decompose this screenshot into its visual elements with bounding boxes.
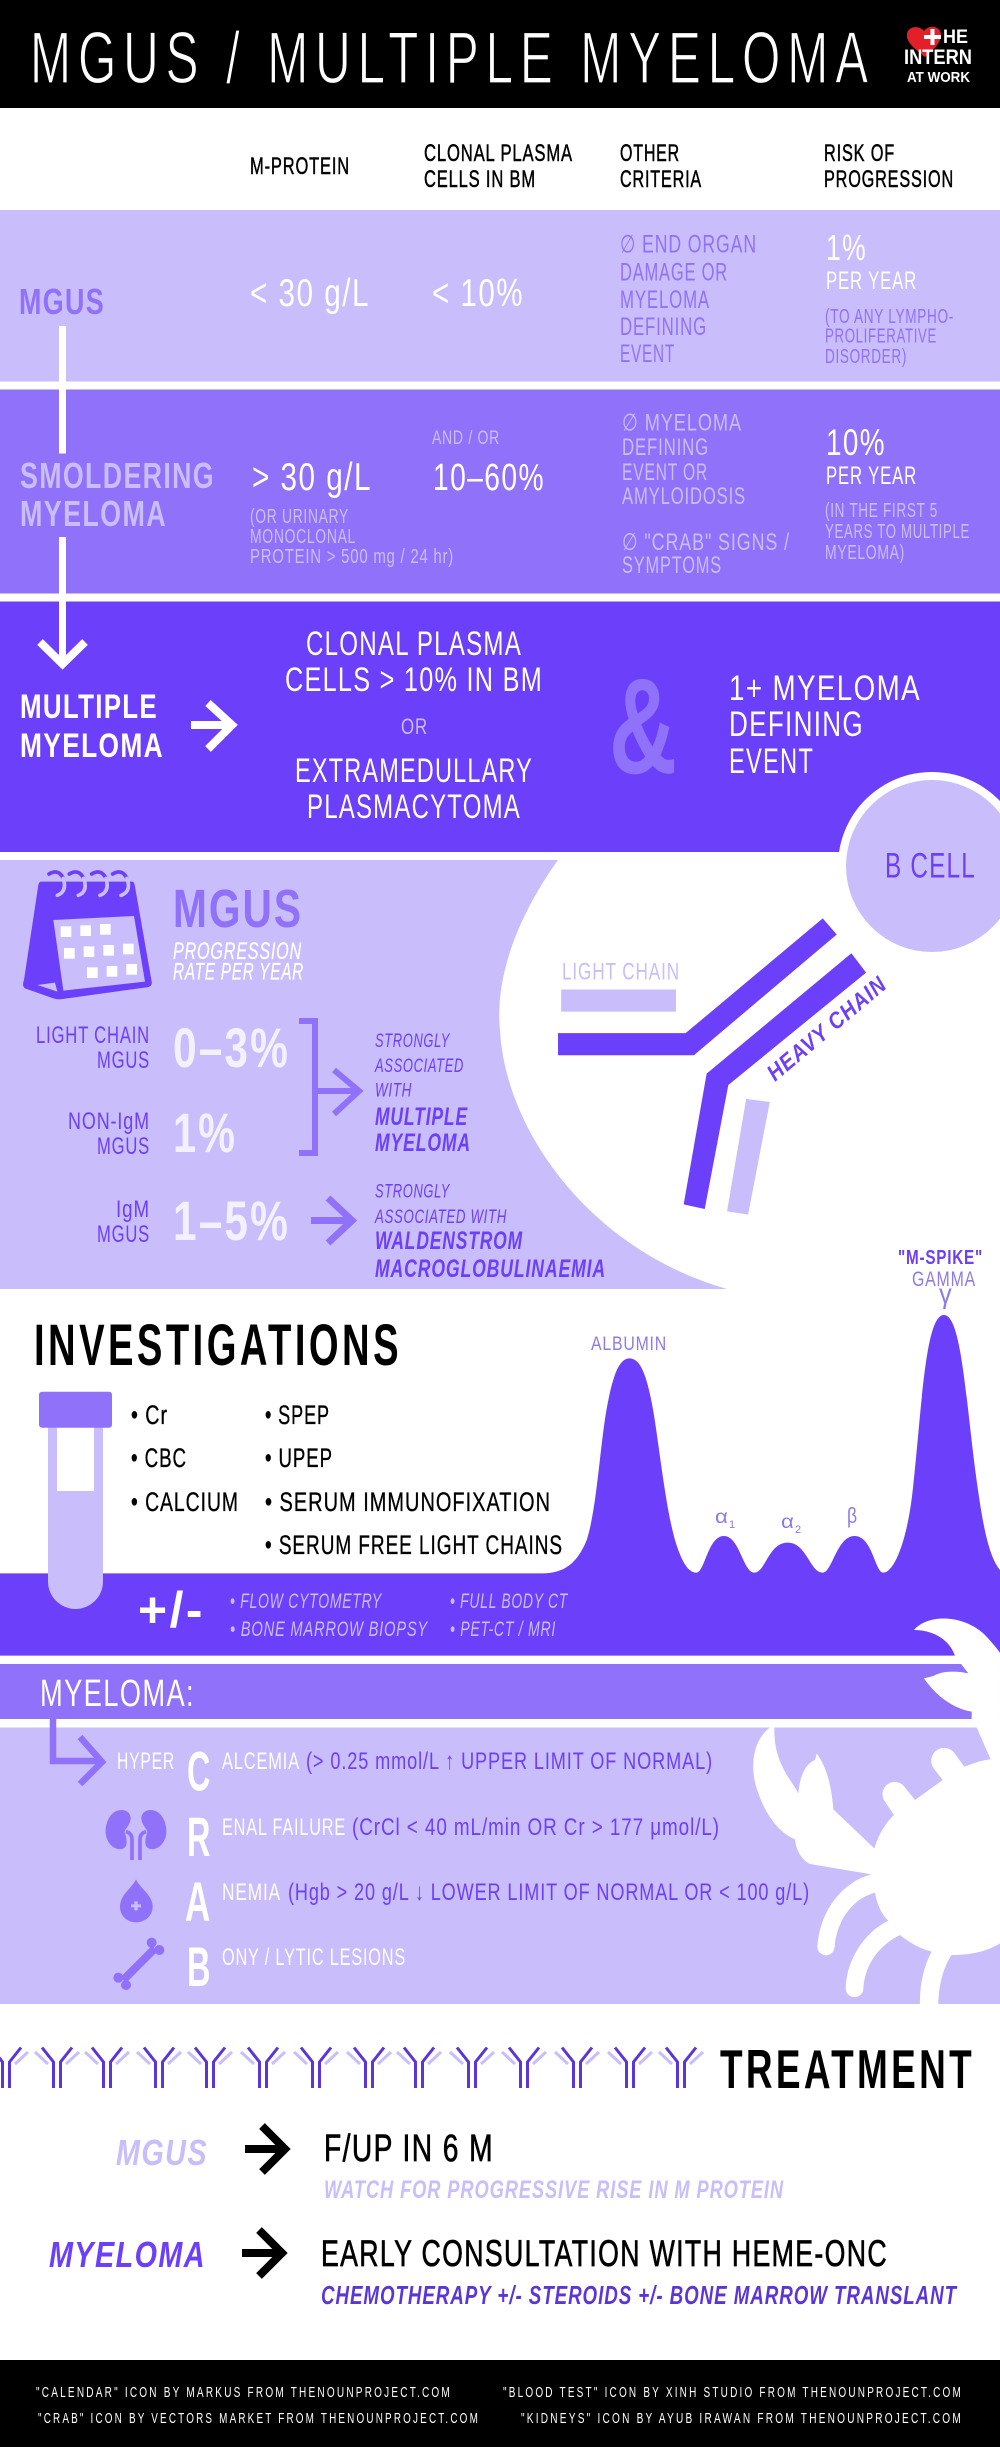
- rates table: LIGHT CHAIN: [36, 1022, 150, 1049]
- panel: smoldering myeloma row: EVENT OR: [622, 459, 708, 486]
- panel: smoldering myeloma row: ∅ MYELOMA: [622, 410, 742, 436]
- icon: B cell: [838, 772, 1000, 960]
- text: anemia: NEMIA: [222, 1879, 281, 1906]
- panel: smoldering myeloma row: PROTEIN > 500 mg / 24 hr): [250, 546, 454, 568]
- chart labels: 1: [729, 1519, 736, 1531]
- letters: CRAB: B: [187, 1935, 212, 1998]
- panel: smoldering myeloma row: MYELOMA: [20, 493, 167, 534]
- icon: bone: [113, 1938, 164, 1990]
- panel: MGUS row: DEFINING: [620, 313, 707, 341]
- text: strongly associated with multiple myeloma: MYELOMA: [375, 1129, 471, 1157]
- text: strongly associated with multiple myeloma: MULTIPLE: [375, 1103, 468, 1131]
- chart labels: γ: [939, 1278, 953, 1309]
- panel: multiple myeloma row: PLASMACYTOMA: [307, 788, 521, 826]
- text: renal failure: (CrCl < 40 mL/min OR Cr > 177 μmol/L): [352, 1814, 720, 1841]
- panel: MGUS row: PER YEAR: [826, 267, 917, 295]
- chart labels: ALBUMIN: [591, 1334, 667, 1355]
- logo: The Intern at Work: HE: [943, 27, 968, 48]
- logo: The Intern at Work: [904, 27, 972, 86]
- panel: MGUS row: PROLIFERATIVE: [825, 326, 937, 348]
- panel: smoldering myeloma row: PER YEAR: [826, 462, 917, 490]
- icon: calendar: [23, 872, 152, 999]
- text: anemia: [222, 1879, 810, 1906]
- text: strongly associated with multiple myeloma: STRONGLY: [375, 1031, 450, 1052]
- arrow: myeloma to CRAB: [53, 1719, 102, 1784]
- panel: CRAB criteria: [0, 1719, 1000, 2004]
- panel: multiple myeloma row: EVENT: [729, 742, 814, 781]
- letters: CRAB: [185, 1740, 212, 1998]
- panel: multiple myeloma row: MYELOMA: [20, 727, 164, 765]
- rates table: [36, 1016, 290, 1252]
- list: investigations column 2: [265, 1400, 563, 1560]
- treatment: myeloma: [49, 2230, 958, 2310]
- treatment: MGUS: [116, 2126, 784, 2204]
- column headers: CLONAL PLASMA: [424, 140, 573, 167]
- column headers: OTHER: [620, 140, 680, 167]
- panel: smoldering myeloma row: 10–60%: [433, 457, 545, 499]
- arrow: MGUS treatment: [245, 2126, 285, 2172]
- panel: smoldering myeloma row: MONOCLONAL: [250, 526, 356, 548]
- text: plus/minus investigations: • FLOW CYTOMETRY: [230, 1590, 383, 1613]
- rates table: NON-IgM: [68, 1108, 150, 1135]
- panel: smoldering myeloma row: SYMPTOMS: [622, 552, 722, 579]
- arrow: myeloma treatment: [242, 2230, 282, 2276]
- chart labels: GAMMA: [912, 1268, 976, 1291]
- icon: crab: [753, 1619, 1000, 2005]
- heading: MGUS progression rate: RATE PER YEAR: [173, 958, 304, 986]
- label: heavy chain: HEAVY CHAIN: [762, 971, 892, 1086]
- rates table: 0–3%: [173, 1016, 290, 1079]
- panel: multiple myeloma row: MULTIPLE: [20, 688, 158, 726]
- panel: smoldering myeloma row: ∅ "CRAB" SIGNS /: [622, 529, 790, 556]
- panel: multiple myeloma row: OR: [401, 714, 428, 739]
- text: hypercalcemia: [117, 1748, 713, 1775]
- chart labels: 2: [795, 1524, 802, 1536]
- list: investigations column 1: • CBC: [131, 1443, 187, 1473]
- panel: myeloma CRAB heading: MYELOMA:: [40, 1673, 195, 1715]
- text: strongly associated with Waldenstrom: WALDENSTROM: [375, 1227, 523, 1255]
- list: investigations column 2: • SERUM FREE LIGHT CHAINS: [265, 1530, 563, 1560]
- treatment: MGUS: WATCH FOR PROGRESSIVE RISE IN M PROTEIN: [324, 2176, 784, 2204]
- icon row: antibodies: [0, 2048, 703, 2088]
- text: strongly associated with Waldenstrom: [374, 1182, 606, 1283]
- text: renal failure: ENAL FAILURE: [222, 1814, 346, 1841]
- chart labels: α: [715, 1507, 729, 1528]
- panel: smoldering myeloma row: [0, 390, 1000, 594]
- panel: multiple myeloma row: &: [609, 650, 677, 802]
- letters: CRAB: R: [187, 1805, 212, 1868]
- panel: MGUS row: DAMAGE OR: [620, 258, 728, 286]
- text: strongly associated with multiple myeloma: [374, 1031, 471, 1157]
- logo: The Intern at Work: AT WORK: [907, 70, 970, 86]
- footer credits: "CALENDAR" ICON BY MARKUS FROM THENOUNPROJECT.COM: [36, 2385, 452, 2401]
- icon: kidneys: [106, 1810, 166, 1860]
- chart labels: β: [847, 1503, 858, 1528]
- heading: treatment with antibody row: [0, 2038, 975, 2100]
- panel: multiple myeloma row: 1+ MYELOMA: [729, 669, 921, 708]
- arrow: multiple myeloma to criteria: [191, 703, 232, 749]
- panel: smoldering myeloma row: (OR URINARY: [250, 506, 349, 528]
- text: hypercalcemia: ALCEMIA: [222, 1748, 300, 1775]
- column headers: CELLS IN BM: [424, 166, 536, 193]
- panel: MGUS row: MYELOMA: [620, 286, 710, 314]
- treatment: myeloma: MYELOMA: [49, 2234, 206, 2275]
- text: renal failure: [222, 1814, 720, 1841]
- footer credits: [0, 2360, 1000, 2447]
- panel: MGUS row: DISORDER): [825, 346, 907, 368]
- text: plus/minus investigations: • PET-CT / MRI: [450, 1618, 556, 1641]
- panel: MGUS row: < 10%: [432, 272, 524, 315]
- list: investigations column 2: • SERUM IMMUNOFIXATION: [265, 1487, 551, 1517]
- panel: MGUS row: < 30 g/L: [250, 272, 370, 315]
- panel: smoldering myeloma row: AND / OR: [432, 428, 500, 449]
- arrow: MGUS to multiple myeloma progression: [40, 326, 85, 665]
- list: investigations column 1: [131, 1400, 239, 1517]
- text: plus/minus investigations: • FULL BODY CT: [450, 1590, 569, 1613]
- chart labels: [591, 1247, 983, 1536]
- diagram: antibody: [558, 918, 892, 1215]
- panel: MGUS row: 1%: [826, 227, 867, 268]
- text: plus/minus investigations: [138, 1582, 569, 1641]
- column headers: CRITERIA: [620, 166, 702, 193]
- icon: blood test tube: [39, 1392, 112, 1609]
- panel: myeloma CRAB heading: [0, 1664, 1000, 1719]
- rates table: 1–5%: [173, 1189, 290, 1252]
- text: hypercalcemia: (> 0.25 mmol/L ↑ UPPER LIMIT OF NORMAL): [306, 1748, 713, 1775]
- heading: MGUS progression rate: MGUS: [173, 879, 303, 939]
- column headers: [250, 140, 954, 193]
- panel: multiple myeloma row: CLONAL PLASMA: [306, 625, 522, 663]
- rates table: MGUS: [97, 1047, 150, 1074]
- panel: multiple myeloma row: [0, 602, 1000, 852]
- rates table: MGUS: [97, 1221, 150, 1248]
- text: strongly associated with Waldenstrom: STRONGLY: [375, 1182, 450, 1202]
- panel: MGUS row: MGUS: [19, 281, 105, 322]
- rates table: IgM: [116, 1196, 150, 1223]
- heading: MGUS progression rate: [173, 879, 304, 986]
- panel: smoldering myeloma row: (IN THE FIRST 5: [825, 500, 938, 522]
- panel: MGUS row: ∅ END ORGAN: [620, 230, 757, 258]
- bracket and arrow: multiple myeloma: [299, 1021, 359, 1153]
- text: strongly associated with multiple myeloma: ASSOCIATED: [374, 1056, 464, 1077]
- list: investigations column 1: • CALCIUM: [131, 1487, 239, 1517]
- panel: MGUS row: EVENT: [620, 340, 675, 368]
- label: light chain: LIGHT CHAIN: [562, 958, 680, 986]
- panel: multiple myeloma row: EXTRAMEDULLARY: [295, 752, 533, 790]
- panel: smoldering myeloma row: AMYLOIDOSIS: [622, 483, 746, 510]
- panel: smoldering myeloma row: SMOLDERING: [20, 455, 215, 496]
- chart labels: α: [781, 1512, 795, 1533]
- chart: serum protein electrophoresis curve and band: [0, 1315, 1000, 1656]
- header bar: [0, 0, 1000, 108]
- letters: CRAB: C: [187, 1740, 212, 1803]
- letters: CRAB: A: [185, 1870, 212, 1933]
- text: strongly associated with multiple myeloma: WITH: [375, 1080, 412, 1102]
- text: plus/minus investigations: +/-: [138, 1582, 205, 1638]
- column headers: RISK OF: [824, 140, 895, 167]
- arrow: Waldenstrom: [311, 1198, 352, 1243]
- logo: The Intern at Work: INTERN: [904, 46, 972, 69]
- heading: MGUS progression rate: PROGRESSION: [173, 938, 302, 965]
- text: anemia: (Hgb > 20 g/L ↓ LOWER LIMIT OF NORMAL OR < 100 g/L): [288, 1879, 810, 1906]
- text: bony lesions: ONY / LYTIC LESIONS: [222, 1944, 406, 1971]
- treatment: MGUS: F/UP IN 6 M: [324, 2128, 494, 2170]
- heading: investigations: INVESTIGATIONS: [34, 1313, 402, 1378]
- panel: smoldering myeloma row: > 30 g/L: [252, 456, 372, 499]
- text: hypercalcemia: HYPER: [117, 1748, 175, 1775]
- list: investigations column 2: • SPEP: [265, 1400, 330, 1430]
- treatment: MGUS: MGUS: [116, 2132, 208, 2173]
- panel: MGUS row: [0, 210, 1000, 382]
- text: strongly associated with Waldenstrom: MACROGLOBULINAEMIA: [375, 1255, 606, 1283]
- panel: smoldering myeloma row: 10%: [826, 422, 886, 463]
- rates table: 1%: [173, 1101, 237, 1164]
- panel: smoldering myeloma row: MYELOMA): [825, 542, 905, 564]
- list: investigations column 2: • UPEP: [265, 1443, 333, 1473]
- text: strongly associated with Waldenstrom: ASSOCIATED WITH: [374, 1207, 507, 1228]
- text: plus/minus investigations: • BONE MARROW BIOPSY: [230, 1618, 429, 1641]
- column headers: M-PROTEIN: [250, 153, 350, 180]
- panel: smoldering myeloma row: DEFINING: [622, 434, 709, 461]
- list: investigations column 1: • Cr: [131, 1400, 168, 1430]
- panel: multiple myeloma row: DEFINING: [729, 705, 864, 744]
- panel: MGUS progression rate: [0, 860, 727, 1289]
- icon: blood drop: [120, 1879, 153, 1922]
- panel: multiple myeloma row: CELLS > 10% IN BM: [285, 661, 543, 699]
- footer credits: "CRAB" ICON BY VECTORS MARKET FROM THENOUNPROJECT.COM: [38, 2411, 480, 2427]
- rates table: MGUS: [97, 1133, 150, 1160]
